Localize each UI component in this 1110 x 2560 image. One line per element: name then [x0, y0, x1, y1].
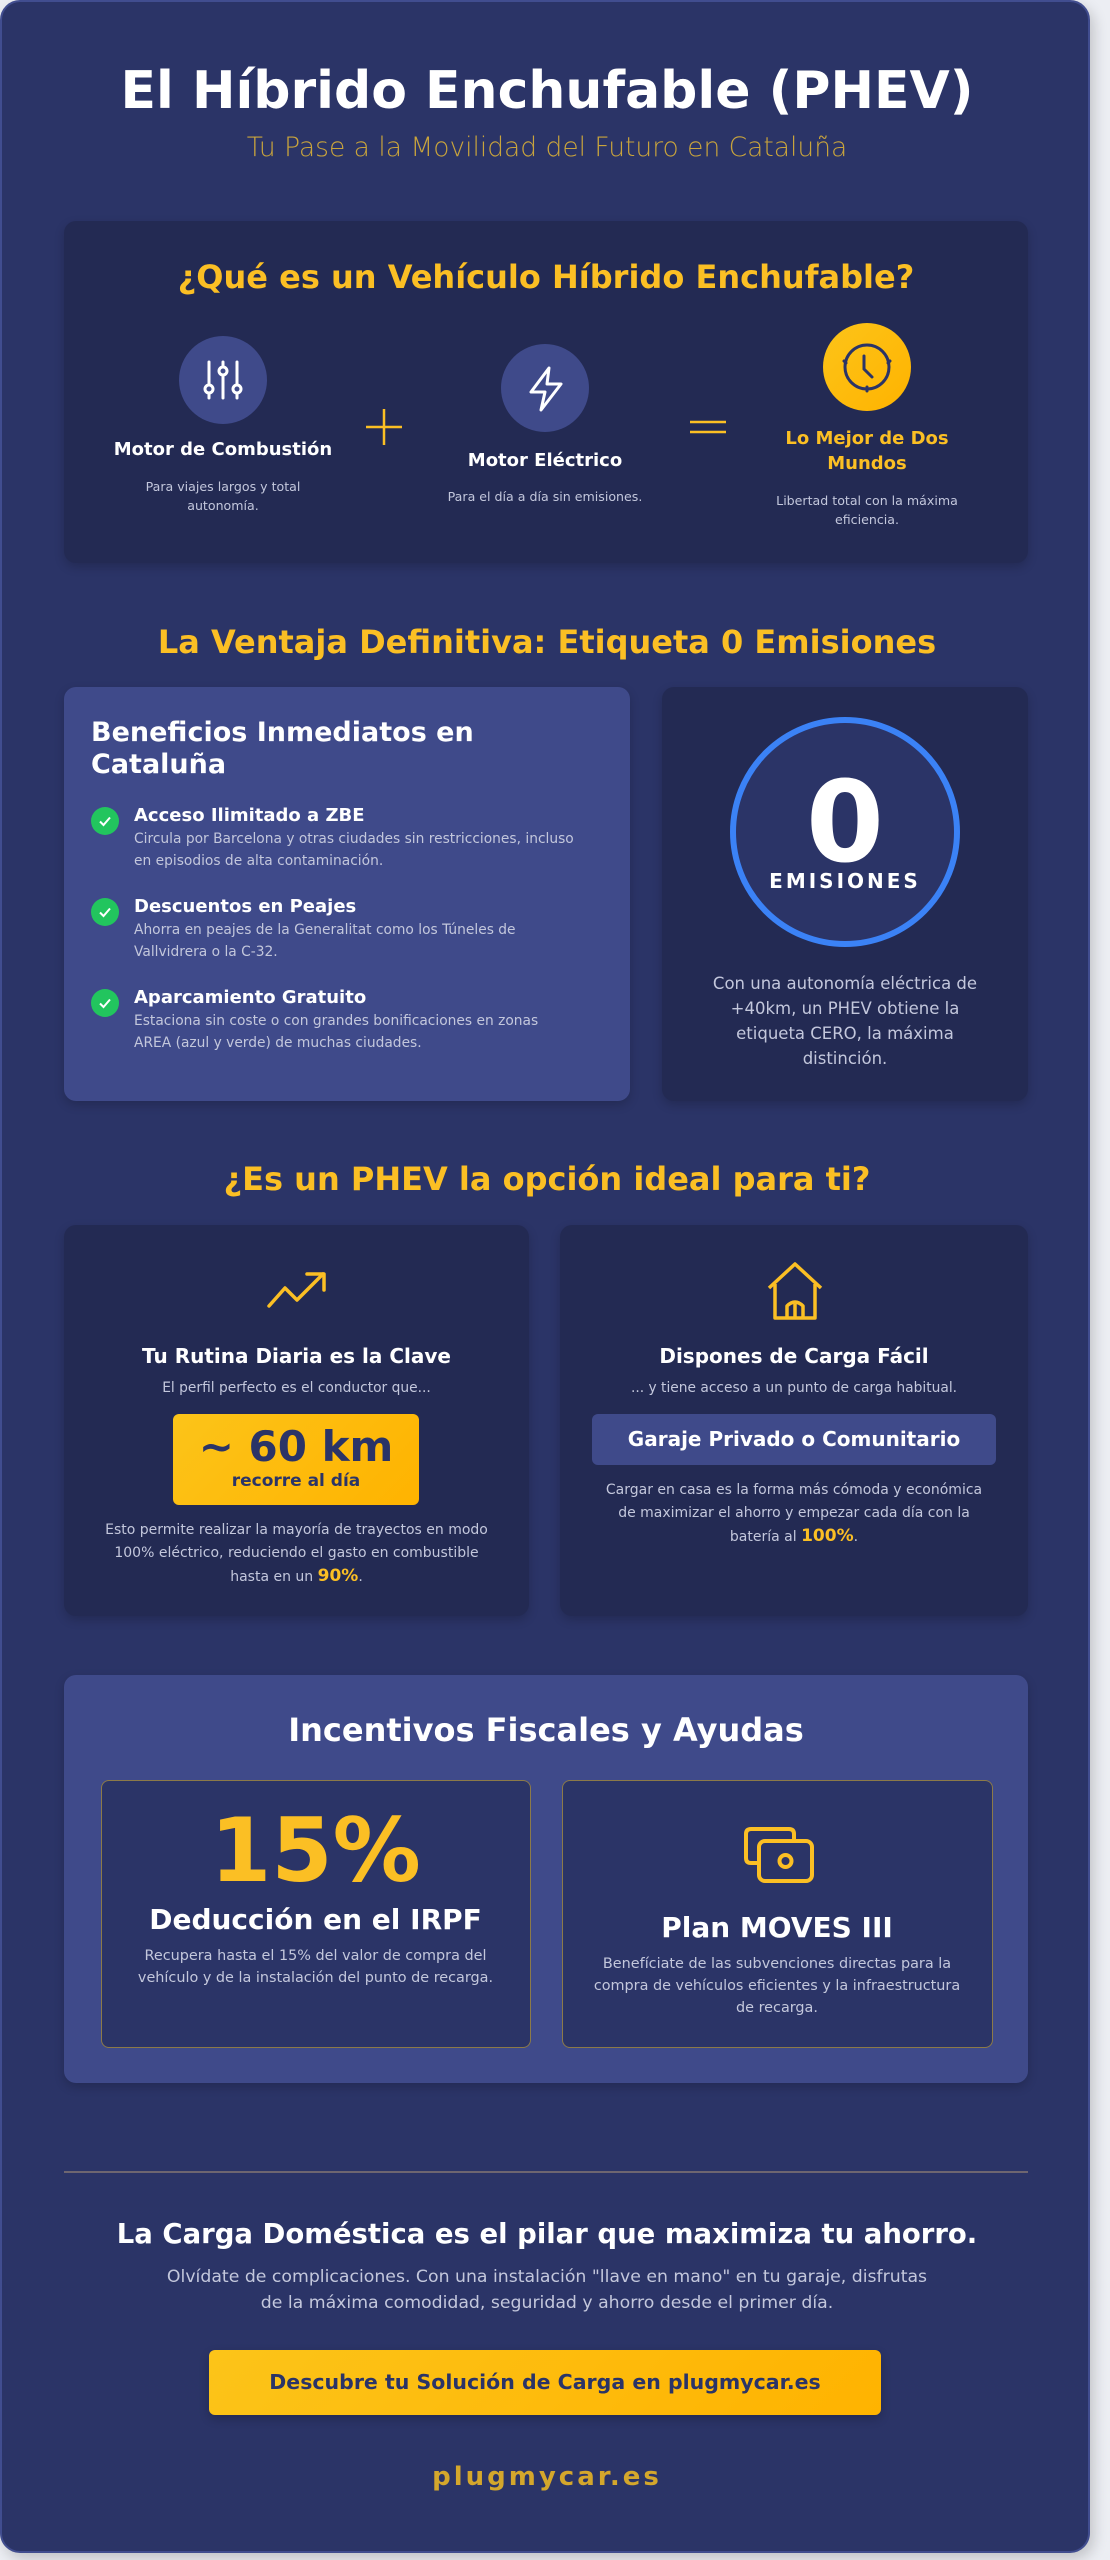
closing text	[167, 2267, 927, 2313]
card: IRPF: vehículo y de la instalación del punto de recarga.	[138, 1970, 493, 1986]
panel heading	[91, 717, 474, 780]
label: Lo Mejor de Dos	[785, 428, 949, 449]
tag: garaje	[592, 1414, 996, 1465]
panel: beneficios	[64, 687, 630, 1101]
desc: Libertad total con la máxima	[776, 493, 958, 508]
subtitle: Tu Pase a la Movilidad del Futuro en Cataluña	[247, 132, 847, 163]
panel heading: Beneficios Inmediatos en	[91, 717, 474, 748]
desc	[606, 1482, 982, 1546]
subtitle: El perfil perfecto es el conductor que...	[162, 1380, 431, 1396]
item: aparcamiento: Estaciona sin coste o con grandes bonificaciones en zonas	[134, 1013, 538, 1029]
panel: carga facil	[560, 1225, 1028, 1616]
tag: garaje: Garaje Privado o Comunitario	[628, 1427, 960, 1451]
panel: rutina diaria	[64, 1225, 529, 1616]
panel heading: ¿Qué es un Vehículo Híbrido Enchufable?	[178, 258, 914, 296]
item: aparcamiento	[91, 987, 538, 1050]
item: best of both	[776, 323, 958, 527]
desc	[776, 493, 958, 527]
item: peajes	[91, 896, 516, 960]
item: ZBE: Circula por Barcelona y otras ciudades sin restricciones, incluso	[134, 831, 574, 847]
heading: ideal para ti: ¿Es un PHEV la opción ideal para ti?	[224, 1160, 870, 1198]
label: Mundos	[827, 453, 907, 474]
desc: 100% eléctrico, reduciendo el gasto en combustible	[114, 1545, 479, 1561]
item: electric	[448, 344, 642, 504]
icon: check	[91, 898, 119, 926]
icon: check	[91, 807, 119, 835]
heading: etiqueta 0: La Ventaja Definitiva: Etiqueta 0 Emisiones	[158, 623, 936, 661]
closing text: Olvídate de complicaciones. Con una instalación "llave en mano" en tu garaje, disfrutas	[167, 2267, 927, 2287]
desc: autonomía.	[187, 498, 259, 513]
icon: sliders	[179, 336, 267, 424]
stat box: 60 km	[173, 1414, 419, 1505]
label	[785, 428, 949, 474]
desc: +40km, un PHEV obtiene la	[731, 999, 959, 1018]
badge: 0 emisiones: 0	[806, 758, 884, 888]
desc: Para el día a día sin emisiones.	[448, 489, 642, 504]
icon: plus	[366, 409, 402, 445]
card: MOVES: Plan MOVES III	[661, 1911, 893, 1944]
footer brand: plugmycar.es	[432, 2462, 662, 2492]
badge: 0 emisiones: EMISIONES	[769, 869, 921, 893]
desc: Cargar en casa es la forma más cómoda y económica	[606, 1482, 982, 1498]
card: MOVES: Benefíciate de las subvenciones directas para la	[603, 1956, 951, 1972]
item: peajes: Ahorra en peajes de la Generalitat como los Túneles de	[134, 922, 516, 938]
desc: batería al 100%.	[730, 1526, 858, 1546]
panel: 0 emisiones	[662, 687, 1028, 1101]
card: IRPF: Recupera hasta el 15% del valor de compra del	[145, 1948, 486, 1964]
desc: etiqueta CERO, la máxima	[736, 1024, 954, 1043]
card: IRPF	[101, 1780, 531, 2048]
desc	[105, 1522, 488, 1586]
badge: 0 emisiones	[730, 717, 960, 947]
desc: hasta en un 90%.	[230, 1566, 363, 1586]
label: Motor de Combustión	[114, 439, 332, 460]
closing text: de la máxima comodidad, seguridad y ahorro desde el primer día.	[261, 2293, 833, 2313]
CTA button	[209, 2350, 881, 2415]
item: ZBE: en episodios de alta contaminación.	[134, 852, 383, 868]
item: ZBE	[91, 805, 574, 868]
item: aparcamiento: AREA (azul y verde) de muchas ciudades.	[134, 1034, 422, 1050]
item: peajes: Descuentos en Peajes	[134, 896, 356, 917]
card: MOVES	[562, 1780, 993, 2048]
title: El Híbrido Enchufable (PHEV)	[120, 61, 974, 121]
desc: de maximizar el ahorro y empezar cada día con la	[618, 1505, 970, 1521]
icon: clock	[823, 323, 911, 411]
closing heading: La Carga Doméstica es el pilar que maximiza tu ahorro.	[117, 2218, 977, 2250]
stat box: 60 km: ~ 60 km	[199, 1422, 393, 1471]
label: Motor Eléctrico	[468, 450, 622, 471]
icon: house	[768, 1262, 822, 1320]
title: Dispones de Carga Fácil	[659, 1344, 929, 1368]
title: Tu Rutina Diaria es la Clave	[142, 1344, 451, 1368]
panel: que es un PHEV	[64, 221, 1028, 563]
icon: trending up	[267, 1272, 326, 1308]
desc: Para viajes largos y total	[146, 479, 300, 494]
item: combustion	[114, 336, 332, 513]
panel heading: Cataluña	[91, 749, 226, 780]
subtitle: ... y tiene acceso a un punto de carga habitual.	[631, 1380, 957, 1396]
icon: check	[91, 989, 119, 1017]
card: IRPF: Deducción en el IRPF	[149, 1903, 482, 1936]
desc: eficiencia.	[835, 512, 899, 527]
card: MOVES: de recarga.	[736, 2000, 818, 2016]
heading: Incentivos Fiscales y Ayudas	[288, 1711, 804, 1749]
desc	[713, 974, 977, 1068]
icon: bolt	[501, 344, 589, 432]
item: aparcamiento: Aparcamiento Gratuito	[134, 987, 366, 1008]
card: IRPF: 15%	[210, 1799, 421, 1902]
desc: distinción.	[803, 1049, 887, 1068]
card: MOVES: compra de vehículos eficientes y la infraestructura	[594, 1978, 960, 1994]
item: ZBE: Acceso Ilimitado a ZBE	[134, 805, 365, 826]
desc: Con una autonomía eléctrica de	[713, 974, 977, 993]
icon: money	[744, 1827, 814, 1883]
item: peajes: Vallvidrera o la C-32.	[134, 944, 278, 960]
stat box: 60 km: recorre al día	[232, 1471, 360, 1491]
icon: equals	[690, 420, 726, 434]
CTA button: Descubre tu Solución de Carga en plugmycar.es	[269, 2370, 821, 2394]
desc	[146, 479, 300, 513]
desc: Esto permite realizar la mayoría de trayectos en modo	[105, 1522, 488, 1538]
panel: incentivos	[64, 1675, 1028, 2083]
